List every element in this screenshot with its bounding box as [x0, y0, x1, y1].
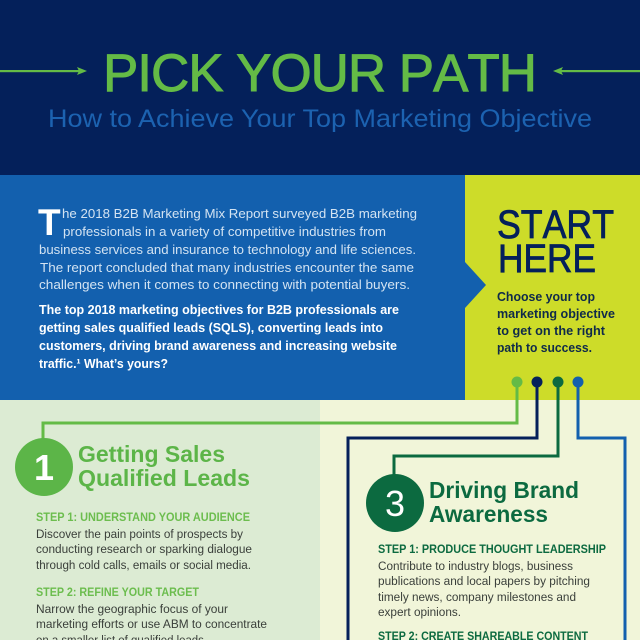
intro paragraph: professionals in a variety of competitive industries from	[63, 224, 386, 239]
panel: objective 3 background	[320, 400, 640, 640]
start here text: marketing objective	[497, 307, 615, 321]
step 1 of objective 1	[36, 511, 252, 572]
step 1 of objective 3: timely news, company milestones and	[378, 590, 576, 604]
start here text: Choose your top	[497, 290, 595, 304]
step 1 of objective 3: STEP 1: PRODUCE THOUGHT LEADERSHIP	[378, 543, 606, 556]
step 1 of objective 3: publications and local papers by pitching	[378, 574, 590, 588]
badge: 1	[15, 438, 73, 496]
intro paragraph: The report concluded that many industries encounter the same	[40, 260, 414, 275]
bold paragraph: getting sales qualified leads (SQLS), converting leads into	[39, 320, 383, 335]
step 2 of objective 1	[36, 586, 267, 640]
panel: objective 1 background	[0, 400, 320, 640]
step 2 of objective 1: Narrow the geographic focus of your	[36, 602, 228, 616]
step 1 of objective 3	[378, 543, 606, 619]
step 1 of objective 3: expert opinions.	[378, 605, 461, 619]
start here text	[497, 290, 615, 355]
notch arrow	[465, 262, 486, 308]
intro paragraph: business services and insurance to technology and life sciences.	[39, 242, 416, 257]
step 1 of objective 1: Discover the pain points of prospects by	[36, 527, 244, 541]
start here heading: START	[497, 203, 614, 247]
path: navy to objective 2	[348, 376, 542, 640]
bold paragraph	[39, 302, 399, 371]
badge: 3	[366, 474, 424, 532]
arrow: left	[0, 67, 87, 75]
step 2 of objective 1: marketing efforts or use ABM to concentrate	[36, 617, 267, 631]
heading: objective 3	[429, 477, 579, 527]
step 2 of objective 1: STEP 2: REFINE YOUR TARGET	[36, 586, 199, 599]
path: blue to objective 4	[572, 376, 625, 640]
path: dark green to objective 3	[394, 376, 564, 476]
step 1 of objective 1: STEP 1: UNDERSTAND YOUR AUDIENCE	[36, 511, 250, 524]
start here text: path to success.	[497, 341, 592, 355]
panel: header	[0, 0, 640, 175]
arrow: right	[553, 67, 640, 75]
bold paragraph: The top 2018 marketing objectives for B2B professionals are	[39, 302, 399, 317]
step 1 of objective 1: conducting research or sparking dialogue	[36, 542, 252, 556]
intro paragraph: challenges when it comes to connecting with potential buyers.	[39, 277, 410, 292]
path: green to objective 1	[43, 376, 522, 440]
subtitle: How to Achieve Your Top Marketing Objective	[48, 105, 592, 133]
panel: start here	[465, 175, 640, 400]
intro paragraph: he 2018 B2B Marketing Mix Report surveyed B2B marketing	[62, 206, 417, 221]
bold paragraph: customers, driving brand awareness and increasing website	[39, 338, 397, 353]
heading: objective 1	[78, 441, 250, 491]
start here heading: HERE	[498, 237, 596, 281]
drop cap: T	[38, 202, 61, 243]
start here text: to get on the right	[497, 324, 606, 338]
badge: 1: 1	[34, 447, 54, 488]
badge: 3: 3	[385, 483, 405, 524]
heading: objective 3: Driving Brand	[429, 477, 579, 503]
bold paragraph: traffic.¹ What’s yours?	[39, 356, 168, 371]
step 1 of objective 3: Contribute to industry blogs, business	[378, 559, 573, 573]
title: PICK YOUR PATH	[103, 44, 537, 103]
heading: objective 3: Awareness	[429, 501, 548, 527]
heading: objective 1: Getting Sales	[78, 441, 225, 467]
heading: objective 1: Qualified Leads	[78, 465, 250, 491]
start here heading	[497, 203, 614, 281]
panel: intro	[0, 175, 465, 400]
intro paragraph	[39, 206, 417, 292]
step 1 of objective 1: through cold calls, emails or social media.	[36, 558, 251, 572]
